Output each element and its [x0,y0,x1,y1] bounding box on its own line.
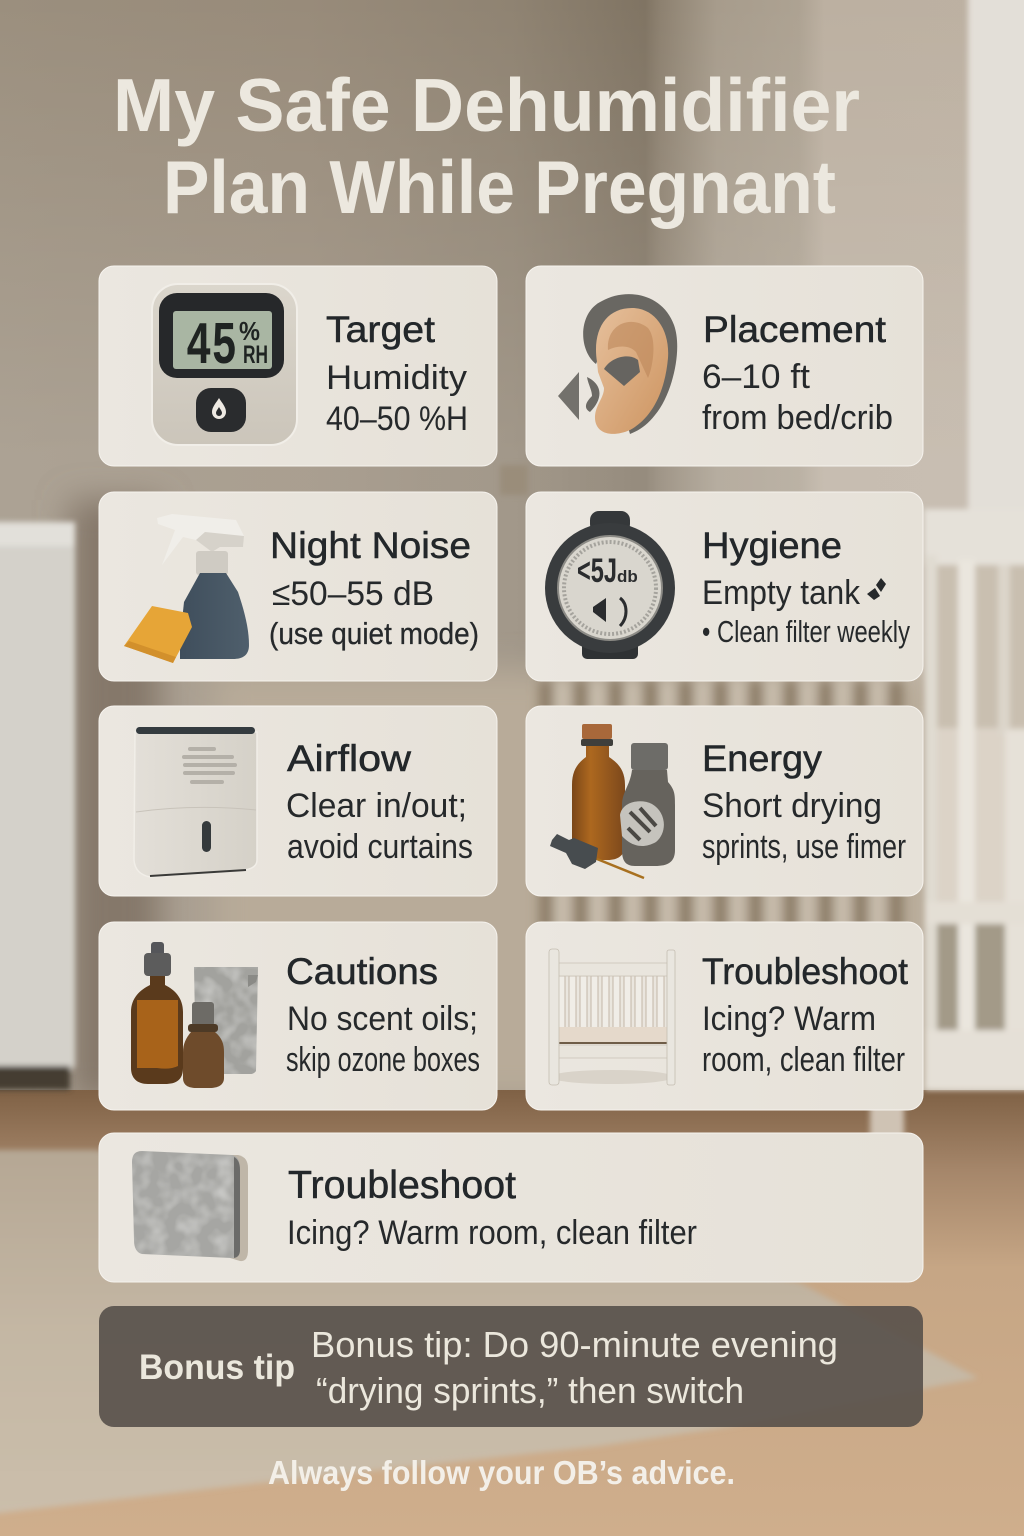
text: hygiene: Empty tank [702,574,861,612]
icon: humidity meter: 45 [186,314,237,382]
icon: dehumidifier [134,727,257,877]
text: cautions [286,951,480,1079]
text: placement: 6–10 ft [702,358,811,396]
text: cautions: Cautions [286,951,438,992]
text: placement: Placement [703,309,887,350]
panel: energy [526,706,923,896]
panel: troubleshoot crib [526,922,923,1110]
icon: decibel dial: <5J [577,552,617,590]
text: energy: sprints, use fimer [702,828,906,866]
text: target humidity: Humidity [326,359,467,397]
bonus tip text: “drying sprints,” then switch [316,1370,744,1411]
text: hygiene: Hygiene [702,525,842,566]
panel: airflow [99,706,497,896]
text: cautions: skip ozone boxes [286,1041,480,1079]
text: night noise [269,525,479,651]
text: energy: Short drying [702,787,882,825]
text: night noise: (use quiet mode) [269,616,479,651]
text: airflow: avoid curtains [287,828,473,866]
icon: crib [549,949,675,1085]
text: airflow: Airflow [287,738,411,779]
panel: cautions [99,922,497,1110]
panel: troubleshoot wide [99,1133,923,1282]
text: target humidity [326,309,468,438]
text: target humidity: 40–50 %H [326,400,468,438]
text: airflow [286,738,473,866]
icon: amber and gray bottles with dropper [550,724,675,878]
footer note: Always follow your OB’s advice. [268,1454,735,1491]
text: cautions: No scent oils; [287,1000,478,1038]
text: placement [702,309,893,437]
icon: small droplets [867,578,886,600]
text: troubleshoot crib: room, clean filter [702,1041,905,1079]
bonus tip text: Bonus tip: Do 90-minute evening [311,1324,838,1365]
panel: night noise [99,492,497,681]
text: energy [702,738,906,866]
title [113,63,860,229]
icon: gray filter stone [132,1151,248,1261]
text: hygiene [702,525,910,649]
bonus tip text [311,1324,838,1411]
icon: humidity meter [152,284,297,445]
text: night noise: Night Noise [270,525,471,566]
panel: placement [526,266,923,466]
icon: decibel dial: db [617,567,638,586]
text: troubleshoot wide: Icing? Warm room, clean filter [287,1214,697,1252]
text: hygiene: • Clean filter weekly [702,614,910,649]
title: Plan While Pregnant [163,145,836,229]
panel: hygiene [526,492,923,681]
icon: humidity meter: RH [243,341,268,369]
text: energy: Energy [702,738,823,779]
text: night noise: ≤50–55 dB [272,575,434,613]
text: target humidity: Target [326,309,436,350]
icon: oil bottles and ozone box [131,942,258,1088]
icon: spray bottle and sponge [124,514,249,663]
text: troubleshoot crib: Troubleshoot [702,951,909,992]
text: troubleshoot wide [287,1164,697,1252]
bonus tip label: Bonus tip [139,1348,295,1387]
text: troubleshoot crib [702,951,909,1079]
title: My Safe Dehumidifier [113,63,860,147]
panel: target humidity [99,266,497,466]
icon: humidity meter: % [239,316,260,346]
icon: ear with speaker [558,294,677,434]
text: placement: from bed/crib [702,399,893,437]
panel: bonus tip [99,1306,923,1427]
text: airflow: Clear in/out; [286,787,467,825]
text: troubleshoot crib: Icing? Warm [702,1000,876,1038]
icon: decibel dial [545,511,675,659]
text: troubleshoot wide: Troubleshoot [288,1164,516,1207]
